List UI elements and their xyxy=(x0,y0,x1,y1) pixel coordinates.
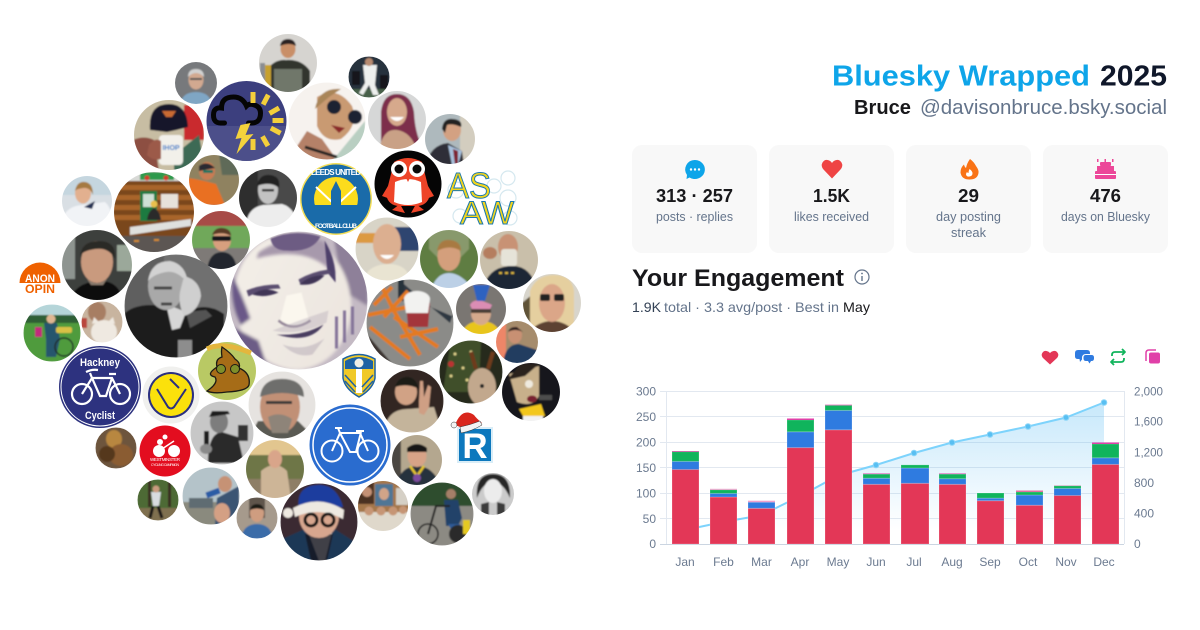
avatar: hackney cyclist badge xyxy=(59,346,141,428)
avatar: selfie with crowd xyxy=(182,467,240,525)
avatar: leeds united crest: LEEDS UNITED xyxy=(311,168,361,177)
engagement summary: May xyxy=(843,299,870,315)
avatar: football action xyxy=(348,56,390,98)
stat card: streak: day posting xyxy=(936,209,1001,224)
avatar: man with white cat xyxy=(81,301,123,344)
month labels: May xyxy=(827,555,849,569)
right axis labels xyxy=(1134,384,1163,551)
icon: legend repost xyxy=(1111,349,1125,365)
avatar: leeds smiley xyxy=(142,366,200,424)
user name and handle: Bruce xyxy=(854,97,911,119)
right axis labels: 2,000 xyxy=(1134,384,1163,398)
user name and handle: @davisonbruce.bsky.social xyxy=(920,97,1167,119)
avatar: black and white footballer xyxy=(238,168,298,228)
avatar: dogs xyxy=(95,427,137,469)
icon: legend quote xyxy=(1146,350,1160,364)
avatar: woman black and white xyxy=(471,472,515,516)
month labels: Dec xyxy=(1093,555,1115,569)
avatar: man with microphone xyxy=(190,401,254,465)
avatar: leeds shield badge xyxy=(343,354,375,397)
month labels: Oct xyxy=(1019,555,1038,569)
icon: info xyxy=(855,270,869,284)
month labels: Jun xyxy=(866,555,886,569)
left axis labels: 0 xyxy=(649,537,656,551)
avatar: leeds united crest xyxy=(300,163,372,235)
engagement summary: 1.9K xyxy=(632,299,662,315)
stacked bars xyxy=(672,405,1119,544)
engagement chart xyxy=(636,384,1163,569)
stat card: days on Bluesky: days on Bluesky xyxy=(1061,209,1150,224)
avatar: westminster cycling campaign xyxy=(140,426,190,476)
avatar: woman in sunglasses xyxy=(288,82,366,160)
stat card: streak: 29 xyxy=(958,186,979,206)
stat card: likes: likes received xyxy=(794,209,869,224)
avatar: storm cloud xyxy=(206,80,288,162)
avatar: anon opin logo: ANON xyxy=(25,273,55,285)
avatar: man at stadium xyxy=(191,210,251,270)
right axis labels: 400 xyxy=(1134,506,1154,520)
avatar: owl xyxy=(374,150,442,218)
avatar: man drinking from mug xyxy=(479,230,539,290)
month labels: Aug xyxy=(941,555,963,569)
avatar: AS AW logo: AW xyxy=(460,195,515,231)
avatar cluster xyxy=(20,33,582,561)
left axis labels: 100 xyxy=(636,486,656,500)
stat card: streak: streak xyxy=(951,225,986,240)
avatar: person in forest xyxy=(137,479,179,521)
left axis labels xyxy=(636,384,656,551)
avatar: hackney cyclist badge: Hackney xyxy=(80,357,121,369)
avatar: man on chopper bike xyxy=(410,482,474,546)
month labels: Jul xyxy=(906,555,922,569)
avatar: grey haired man xyxy=(174,61,218,105)
avatar: team photo xyxy=(357,480,409,532)
avatar: dog with antlers xyxy=(439,340,503,406)
avatar: orange cyclist xyxy=(188,154,240,206)
avatar: hackney cyclist badge: Cyclist xyxy=(85,410,115,422)
avatar: dark haired man xyxy=(61,229,133,301)
avatar: man in blue blazer xyxy=(495,320,539,364)
month labels: Feb xyxy=(713,555,734,569)
right axis labels: 1,600 xyxy=(1134,414,1163,428)
avatar: young man peace sign xyxy=(380,369,444,433)
title: 2025 xyxy=(1100,60,1167,92)
stat card: days on Bluesky xyxy=(1043,145,1168,253)
avatar: anon opin logo xyxy=(20,263,60,296)
month labels xyxy=(675,555,1115,569)
icon: flame xyxy=(960,159,979,180)
month labels: Sep xyxy=(979,555,1001,569)
avatar: cartoon man xyxy=(501,362,561,424)
avatar: footballer in white shirt xyxy=(61,175,113,227)
avatar: lego cabin xyxy=(113,171,195,254)
avatar: bald smiling man xyxy=(355,217,419,281)
avatar: AS AW logo xyxy=(447,165,517,231)
stat card: streak xyxy=(906,145,1031,253)
avatar: R logo with santa hat xyxy=(451,413,493,466)
avatar: woman with pink hair xyxy=(367,90,427,150)
stat card: posts and replies: posts · replies xyxy=(656,209,733,224)
avatar: poo emoji art xyxy=(198,342,256,400)
stat card: posts and replies xyxy=(632,145,757,253)
avatar: R logo with santa hat: R xyxy=(462,427,488,466)
icon: legend reply xyxy=(1075,350,1094,364)
avatar: westminster cycling campaign: CYCLING CAMPAIGN xyxy=(151,463,179,467)
month labels: Jan xyxy=(675,555,695,569)
avatar: AS AW logo: AS xyxy=(447,165,491,206)
engagement heading: Your Engagement xyxy=(632,265,844,292)
avatar: old man black and white xyxy=(124,254,228,358)
avatar: woman on bicycle xyxy=(23,304,81,362)
icon: cake xyxy=(1095,159,1116,179)
right axis labels: 0 xyxy=(1134,537,1141,551)
avatar: man in check shirt xyxy=(236,497,278,539)
chart legend icons xyxy=(1042,349,1160,365)
left axis labels: 250 xyxy=(636,410,656,424)
left axis labels: 50 xyxy=(643,512,656,526)
avatar: anon opin logo: OPIN xyxy=(25,284,55,296)
icon: heart xyxy=(822,160,842,178)
left axis labels: 150 xyxy=(636,461,656,475)
avatar: blue bicycle sign xyxy=(310,404,390,486)
stat card: likes xyxy=(769,145,894,253)
avatar: leeds united crest: FOOTBALL CLUB xyxy=(315,223,357,230)
icon: legend like xyxy=(1042,351,1058,364)
avatar: man in flat cap xyxy=(248,371,316,439)
stat card: days on Bluesky: 476 xyxy=(1090,186,1121,206)
avatar: medal man xyxy=(391,434,443,486)
month labels: Mar xyxy=(751,555,772,569)
month labels: Nov xyxy=(1055,555,1077,569)
avatar: blue hat selfie xyxy=(455,283,507,335)
stat card: posts and replies: 313 · 257 xyxy=(656,186,733,206)
stat card: likes: 1.5K xyxy=(813,186,850,206)
avatar: man in blue santa hat xyxy=(280,483,358,561)
icon: chat bubble xyxy=(685,160,705,179)
avatar: woman at sunset xyxy=(245,439,305,499)
title: Bluesky Wrapped xyxy=(832,60,1090,92)
avatar: IHOP mug and cap xyxy=(133,99,205,171)
avatar: man with trophy xyxy=(258,33,318,93)
avatar: man in suit xyxy=(424,113,476,165)
avatar: main portrait xyxy=(230,232,368,370)
left axis labels: 300 xyxy=(636,384,656,398)
right axis labels: 1,200 xyxy=(1134,446,1163,460)
cumulative area and line xyxy=(685,400,1107,544)
avatar: blonde woman with glasses xyxy=(522,273,582,333)
avatar: orange bridge and coffee cup xyxy=(366,279,454,367)
engagement summary: total · 3.3 avg/post · Best in xyxy=(664,299,839,315)
month labels: Apr xyxy=(791,555,809,569)
left axis labels: 200 xyxy=(636,436,656,450)
right axis labels: 800 xyxy=(1134,476,1154,490)
avatar: IHOP mug and cap: IHOP xyxy=(162,145,180,152)
avatar: young man with greenery xyxy=(419,229,479,289)
avatar: westminster cycling campaign: WESTMINSTER xyxy=(150,457,181,462)
